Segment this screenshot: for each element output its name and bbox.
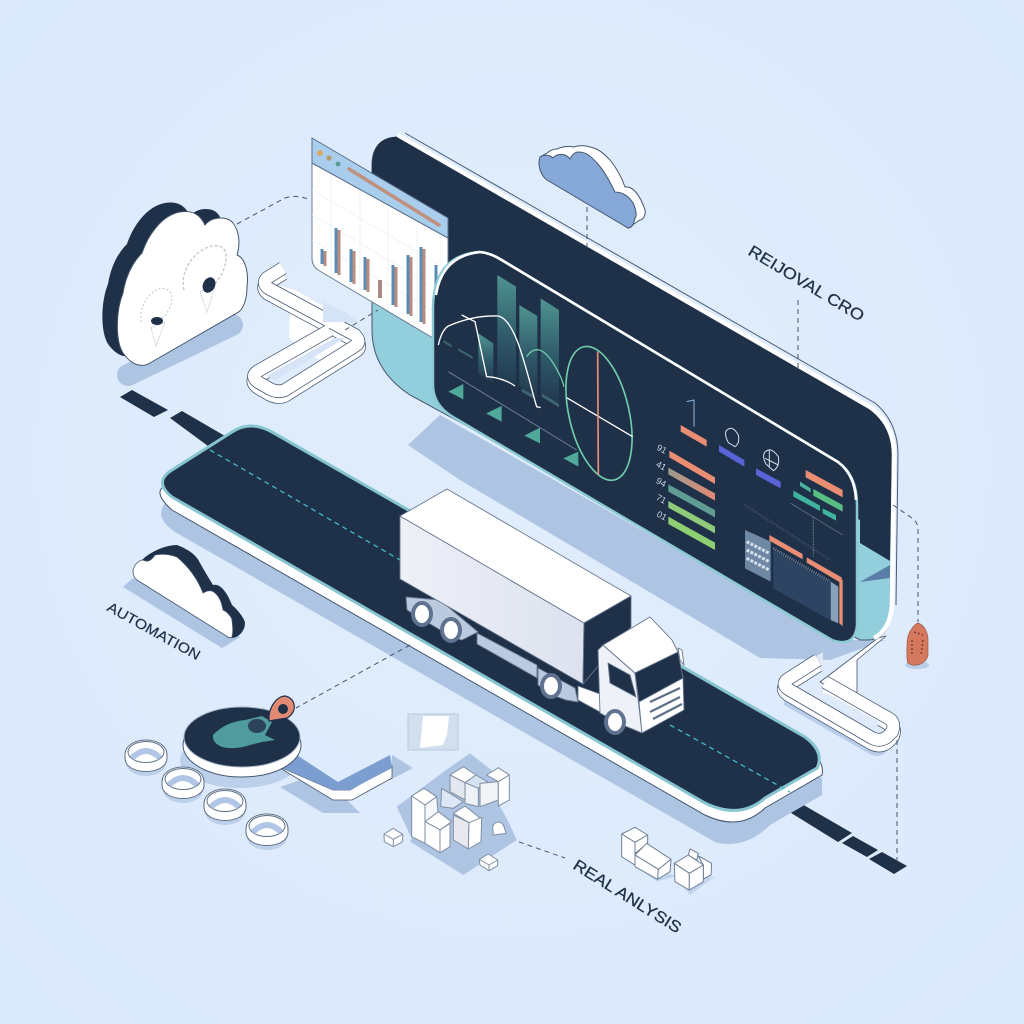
bracket inner tint (266, 338, 345, 380)
disk shadow (180, 732, 300, 788)
small top-right cloud (539, 146, 645, 228)
grille slats (650, 688, 682, 719)
dim teal bars (478, 275, 559, 403)
ring 4 (246, 814, 288, 850)
cargo box top (400, 489, 631, 623)
browser window chart (312, 138, 448, 345)
front wheel (606, 711, 624, 733)
map pin (248, 696, 294, 733)
road white side (160, 436, 822, 822)
small left cloud (133, 545, 245, 638)
drive fender (538, 668, 578, 702)
cloud white face (133, 554, 233, 638)
browser address bar (349, 169, 439, 225)
label: real analysis: REAL ANLYSIS (570, 857, 684, 937)
browser dots (317, 150, 340, 166)
axis and triangles (448, 372, 578, 467)
low front box (425, 812, 452, 853)
browser body (312, 163, 448, 345)
metric icons (726, 428, 779, 471)
furniture boxes right (622, 827, 715, 895)
ring 2 (162, 767, 204, 803)
chassis steps (578, 686, 600, 712)
teal curve (527, 350, 564, 387)
middle box (465, 775, 487, 807)
shadow (622, 857, 715, 895)
road platform (160, 426, 822, 822)
panel contents (438, 275, 843, 626)
box cluster (384, 753, 517, 875)
disk top (184, 707, 300, 767)
gauge icon left (141, 288, 172, 346)
panel rim outline (405, 133, 898, 605)
tall left box (412, 788, 438, 843)
small faded marks (443, 340, 559, 407)
cloud dark back (102, 203, 224, 356)
tag glyphs (912, 632, 923, 655)
mini dashboard (745, 505, 843, 626)
big cloud shadow (128, 325, 232, 375)
crate (674, 855, 703, 890)
rear axle fenders (406, 597, 478, 640)
panel stand: right connector (784, 636, 893, 756)
bracket top outline (254, 268, 358, 391)
box shadow (397, 753, 517, 875)
small bowl (493, 822, 506, 835)
desk (635, 843, 671, 879)
side window (608, 663, 636, 697)
cloud dark back (142, 545, 245, 638)
ring 1 (125, 740, 167, 776)
small cube left (384, 828, 403, 847)
metric tiles (681, 400, 781, 488)
route ribbon (275, 752, 392, 800)
mid front box (453, 806, 482, 849)
back left box (441, 788, 463, 808)
bracket translucent plate (323, 302, 358, 322)
map rings (125, 740, 288, 850)
cloud white side (540, 146, 645, 228)
small left cloud shadow (123, 578, 240, 648)
wheels (413, 603, 560, 697)
back panel (372, 133, 898, 756)
bracket top face (254, 268, 358, 391)
legend bars right (791, 470, 843, 557)
panel base (433, 252, 857, 642)
cab side (598, 645, 642, 733)
road surface (162, 426, 819, 810)
cab top (603, 617, 678, 673)
route ribbon shadows (280, 755, 413, 813)
road strip: upper left (120, 390, 225, 446)
gauge icon right (183, 246, 226, 312)
fuel tank bar (477, 633, 537, 678)
panel fold (860, 565, 890, 582)
mirror (678, 648, 684, 665)
value labels: 91 (655, 442, 669, 456)
cab front grille (639, 678, 684, 733)
panel teal backing (372, 137, 895, 640)
cargo box side (400, 516, 584, 684)
big cloud (102, 203, 248, 365)
ring 3 (204, 789, 246, 825)
label: removal: REIJOVAL CRO (745, 243, 867, 325)
value labels: 71 (654, 492, 668, 506)
front dashboard panel (433, 252, 857, 642)
tall right box (480, 768, 509, 807)
cabinet (622, 827, 648, 865)
orange tag (905, 623, 929, 669)
truck (400, 489, 684, 733)
location disk (180, 696, 413, 813)
horizontal colored bars (668, 451, 715, 550)
bracket lower edge (254, 273, 358, 396)
bar chart (322, 228, 436, 330)
disk rim (183, 713, 301, 777)
left connector bracket (254, 268, 360, 396)
road dashed center line (210, 450, 790, 792)
bracket white fill (270, 283, 360, 360)
panel white rim (398, 135, 894, 638)
tag shadow (905, 661, 929, 669)
value labels (654, 442, 669, 522)
cloud blue face (539, 152, 636, 228)
label: automation: AUTOMATION (105, 599, 203, 663)
back box (450, 767, 476, 800)
connector dashes (237, 196, 918, 860)
map blob (213, 716, 275, 748)
crate back (688, 849, 712, 879)
value labels: 01 (655, 509, 669, 522)
panel dark face (372, 137, 892, 561)
browser header (312, 138, 448, 238)
tag body (907, 623, 928, 665)
road shadow (161, 464, 822, 844)
small cube bottom (479, 854, 498, 871)
road strip: lower right (775, 796, 907, 874)
cloud white face (117, 212, 248, 365)
windshield (635, 652, 683, 702)
bracket body outline (254, 273, 358, 396)
pie ellipse (554, 340, 644, 487)
value labels: 41 (654, 459, 668, 472)
white line chart (438, 315, 541, 408)
value labels: 94 (654, 476, 668, 489)
panel white top rim (436, 252, 856, 500)
cargo box end (583, 596, 631, 684)
floating map sheet (408, 714, 458, 750)
back panel shadow (408, 415, 885, 660)
